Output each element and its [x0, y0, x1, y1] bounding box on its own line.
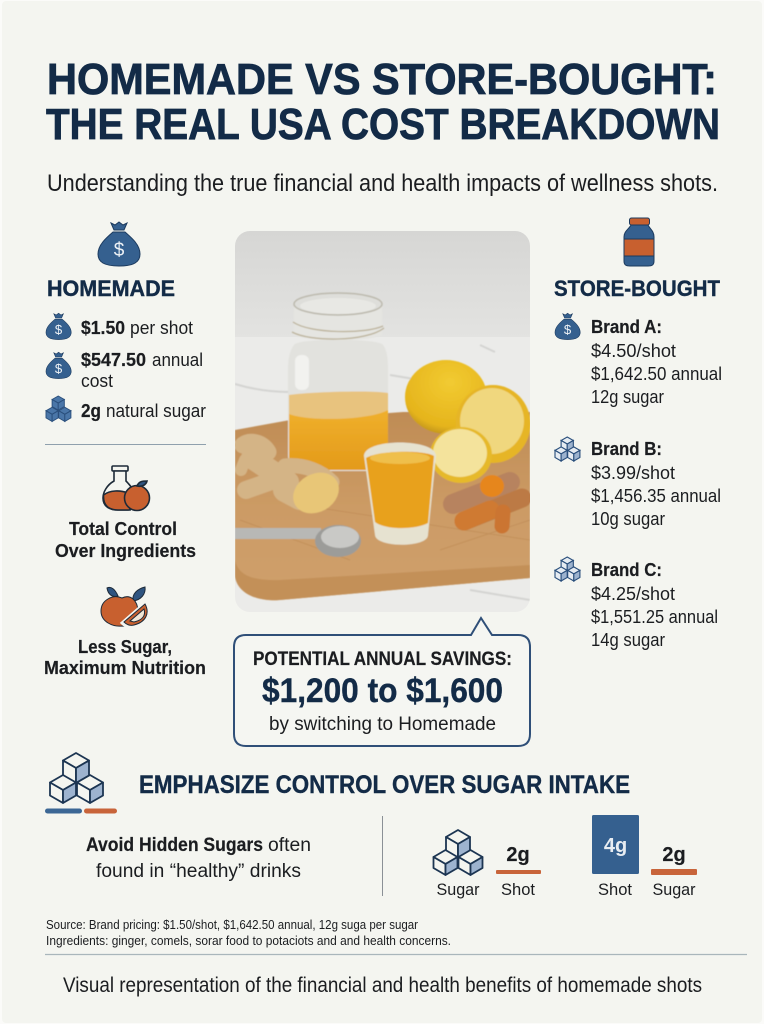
- brand b: $1,456.35 annual: [591, 486, 721, 506]
- callout: potential annual savings: [234, 618, 530, 746]
- text: total control: [55, 519, 196, 561]
- row: annual cost: $: [55, 361, 63, 376]
- row: annual cost: cost: [81, 371, 113, 391]
- photo: ginger turmeric shot on board: [235, 231, 530, 612]
- text: avoid hidden sugars: Avoid Hidden Sugars: [86, 835, 263, 856]
- chart: shot vs sugar comparison right: Sugar: [652, 880, 696, 899]
- chart: shot vs sugar comparison right: 2g: [662, 844, 686, 866]
- text: less sugar: [44, 637, 206, 678]
- panel: store-bought: [554, 218, 722, 650]
- brand c: 14g sugar: [591, 630, 665, 650]
- text: avoid hidden sugars: found in “healthy” drinks: [96, 861, 301, 882]
- shot glass: [364, 442, 436, 545]
- chart: shot vs sugar comparison right: Shot: [598, 880, 632, 899]
- brand c: Brand C:: [591, 560, 662, 580]
- spoon: [235, 528, 321, 539]
- brand a: $4.50/shot: [591, 341, 676, 361]
- row: annual cost: [46, 350, 203, 391]
- row: price per shot: [46, 313, 193, 340]
- title: [46, 55, 720, 149]
- brand a: [555, 313, 722, 407]
- heading: store-bought: STORE-BOUGHT: [554, 276, 721, 301]
- icon: money bag: [98, 222, 140, 266]
- icon: fruit: [101, 587, 149, 627]
- chart: sugar vs shot comparison left: Shot: [501, 880, 535, 899]
- brand a: $: [564, 322, 572, 337]
- brand a: 12g sugar: [591, 387, 664, 407]
- chart: sugar vs shot comparison left: [434, 830, 541, 899]
- row: natural sugar: 2g: [81, 401, 101, 421]
- brand b: Brand B:: [591, 439, 662, 459]
- row: natural sugar: [46, 396, 206, 421]
- half lemon: [456, 385, 530, 463]
- ginger: [241, 442, 332, 498]
- chart: shot vs sugar comparison right: 4g: [604, 835, 627, 857]
- chart: sugar vs shot comparison left: Sugar: [436, 880, 480, 899]
- callout: potential annual savings: POTENTIAL ANNUAL SAVINGS:: [253, 649, 512, 670]
- text: less sugar: Maximum Nutrition: [44, 658, 206, 678]
- text: total control: Over Ingredients: [55, 541, 196, 561]
- brand a: Brand A:: [591, 317, 662, 337]
- text: less sugar: Less Sugar,: [78, 637, 172, 657]
- chart: sugar vs shot comparison left: 2g: [506, 844, 530, 866]
- brand b: $3.99/shot: [591, 463, 675, 483]
- whole lemon: [405, 360, 487, 434]
- heading: emphasize control: EMPHASIZE CONTROL OVER SUGAR INTAKE: [139, 771, 630, 799]
- source note: Source: Brand pricing: $1.50/shot, $1,642.50 annual, 12g suga per sugar: [46, 917, 419, 932]
- source note: Ingredients: ginger, comels, sorar food to potaciots and and health concerns.: [46, 933, 451, 948]
- icon: money bag: $: [114, 240, 125, 261]
- brand b: 10g sugar: [591, 509, 665, 529]
- icon: bottle: [624, 218, 654, 266]
- source note: [46, 917, 451, 948]
- lemon slice: [430, 427, 492, 483]
- board: [235, 412, 530, 600]
- turmeric: [453, 482, 522, 526]
- brand c: $1,551.25 annual: [591, 607, 718, 627]
- title: HOMEMADE VS STORE-BOUGHT:: [47, 55, 717, 104]
- text: avoid hidden sugars: [86, 835, 311, 882]
- row: natural sugar: natural sugar: [106, 401, 206, 421]
- callout: potential annual savings: $1,200 to $1,600: [262, 672, 503, 710]
- row: price per shot: $: [55, 322, 63, 337]
- text: avoid hidden sugars: often: [268, 835, 311, 856]
- footer caption: Visual representation of the financial and health benefits of homemade shots: [63, 974, 702, 997]
- text: total control: Total Control: [69, 519, 177, 539]
- icon: sugar cubes with bars: [45, 753, 117, 814]
- panel: homemade: [44, 222, 206, 678]
- chart: shot vs sugar comparison right: [592, 815, 697, 899]
- row: price per shot: $1.50: [81, 318, 125, 338]
- brand a: $1,642.50 annual: [591, 364, 722, 384]
- row: price per shot: per shot: [130, 318, 193, 338]
- icon: flask and apple: [103, 466, 150, 510]
- brand c: [555, 557, 718, 650]
- callout: potential annual savings: by switching to Homemade: [269, 714, 496, 735]
- row: annual cost: $547.50: [81, 350, 146, 370]
- row: annual cost: annual: [152, 350, 203, 370]
- brand c: $4.25/shot: [591, 584, 675, 604]
- jar: [288, 340, 388, 471]
- heading: homemade: HOMEMADE: [47, 276, 175, 301]
- brand b: [555, 437, 721, 529]
